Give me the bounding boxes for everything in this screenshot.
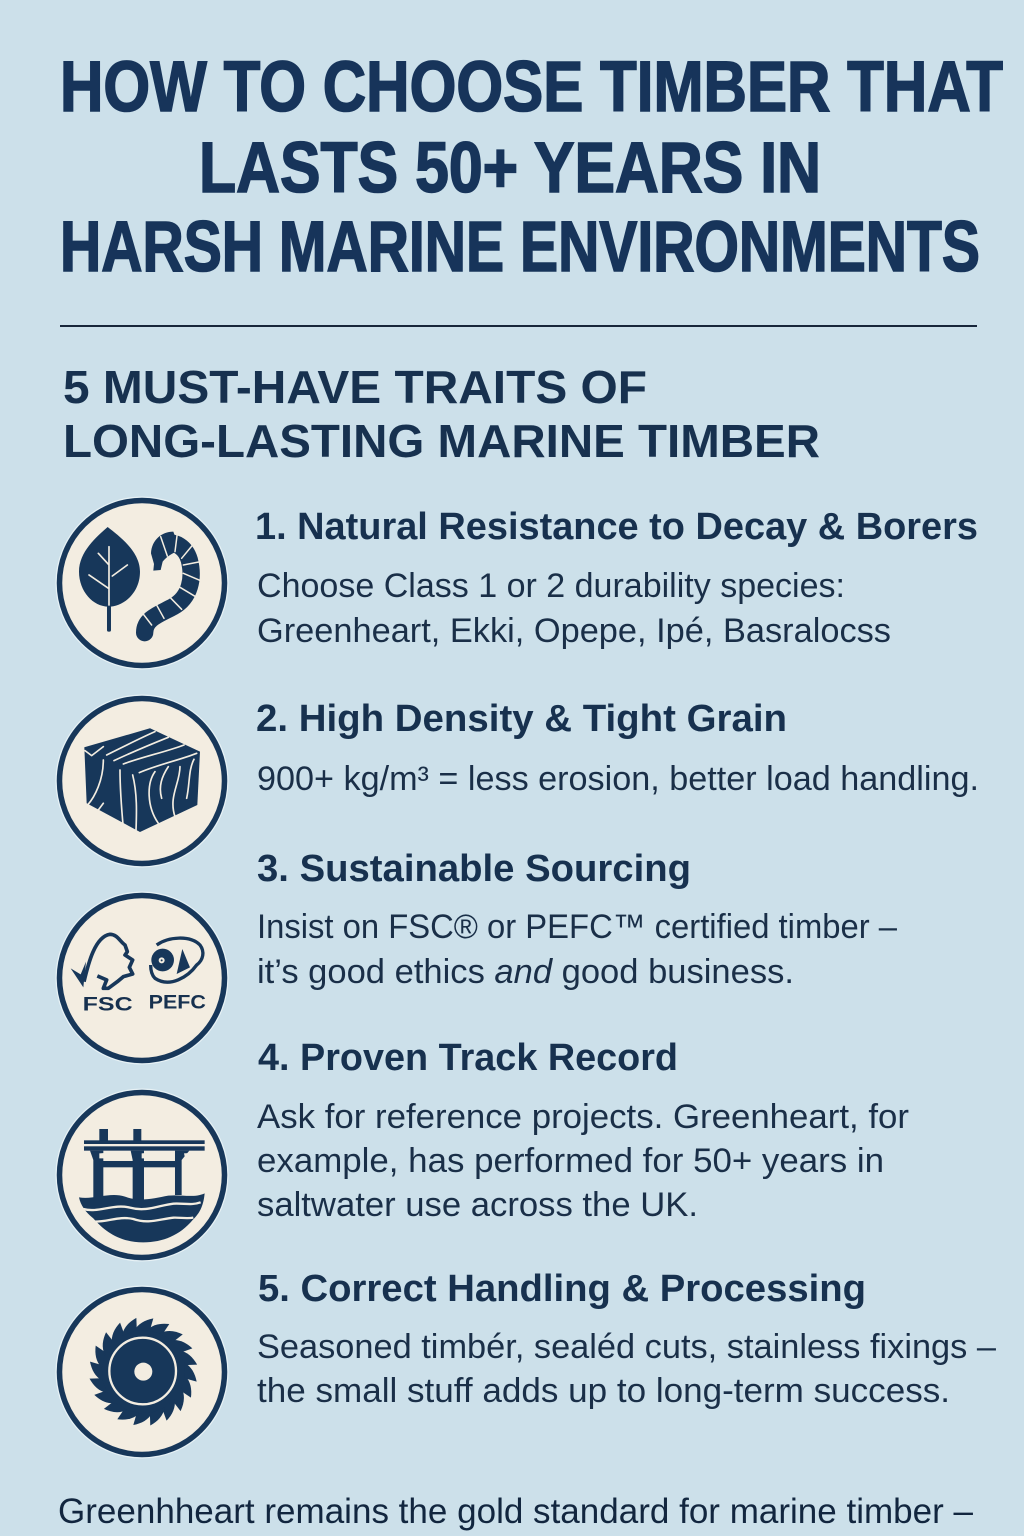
trait 2: 2. High Density & Tight Grain: [256, 698, 787, 740]
trait 3: [257, 848, 897, 991]
trait 5: Seasoned timbér, sealéd cuts, stainless fixings –: [257, 1328, 996, 1366]
trait 1: 1. Natural Resistance to Decay & Borers: [255, 506, 978, 548]
trait 1: Greenheart, Ekki, Opepe, Ipé, Basralocss: [257, 612, 891, 650]
trait 3: 3. Sustainable Sourcing: [257, 848, 691, 890]
trait 1: [255, 506, 978, 650]
icon: pier over water: [56, 1089, 228, 1261]
title: LASTS 50+ YEARS IN: [199, 129, 821, 208]
icon: FSC and PEFC logos: PEFC: [149, 993, 206, 1014]
trait 3: Insist on FSC® or PEFC™ certified timber –: [257, 908, 897, 946]
trait 4: Ask for reference projects. Greenheart, for: [257, 1098, 909, 1136]
trait 4: 4. Proven Track Record: [258, 1037, 678, 1079]
trait 4: [257, 1037, 909, 1224]
icon: circular saw blade: [56, 1286, 228, 1458]
trait 4: saltwater use across the UK.: [257, 1186, 698, 1224]
icon: timber block: [56, 695, 228, 867]
section heading: LONG-LASTING MARINE TIMBER: [63, 415, 820, 467]
trait 3: it’s good ethics and good business.: [257, 953, 794, 991]
trait 5: 5. Correct Handling & Processing: [258, 1268, 866, 1310]
trait 1: Choose Class 1 or 2 durability species:: [257, 567, 845, 605]
section heading: [63, 361, 820, 467]
trait 2: 900+ kg/m³ = less erosion, better load handling.: [257, 760, 979, 798]
icon: leaf and shipworm: [56, 497, 228, 669]
icon: FSC and PEFC logos: FSC: [83, 995, 133, 1016]
title: [60, 48, 1003, 287]
trait 4: example, has performed for 50+ years in: [257, 1142, 884, 1180]
trait 5: the small stuff adds up to long-term success.: [257, 1372, 950, 1410]
trait 2: [256, 698, 979, 798]
trait 5: [257, 1268, 996, 1410]
icon: FSC and PEFC logos: [56, 892, 228, 1064]
section heading: 5 MUST-HAVE TRAITS OF: [63, 361, 647, 413]
footer text: Greenhheart remains the gold standard for marine timber –: [58, 1492, 974, 1531]
